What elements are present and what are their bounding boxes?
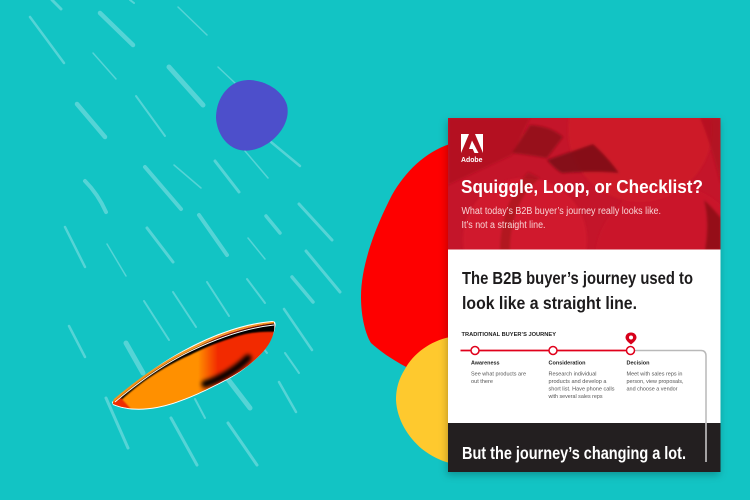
- stage description: Meet with sales reps in: [626, 372, 683, 378]
- red header panel: [448, 118, 720, 250]
- stage description: See what products are: [471, 372, 526, 378]
- stage description: [471, 372, 526, 385]
- header subtitle: [462, 206, 661, 231]
- dark footer band: [448, 423, 720, 472]
- Adobe logo: [461, 134, 483, 164]
- stage description: Research individual: [548, 372, 596, 378]
- main heading: [462, 268, 693, 313]
- rain-like streak pattern: [30, 0, 340, 465]
- logo mark: [461, 134, 483, 153]
- heading line 2: look like a straight line.: [462, 293, 637, 313]
- icon: location pin: [626, 332, 636, 344]
- stage description: [548, 372, 615, 400]
- surfboard outline: [112, 321, 276, 410]
- surfboard shape with orange gradient: [112, 321, 276, 410]
- footer rule: [705, 423, 707, 462]
- stage title: Consideration: [548, 360, 586, 366]
- surfboard highlights: [114, 322, 274, 400]
- card base: [448, 118, 720, 472]
- heading line 1: The B2B buyer’s journey used to: [462, 268, 693, 288]
- stage marker: consideration: [549, 346, 557, 354]
- gray continuation line: [635, 350, 706, 462]
- stage description: person, view proposals,: [626, 379, 684, 385]
- subtitle line 2: It’s not a straight line.: [462, 220, 546, 231]
- red blob: [361, 144, 450, 400]
- blue blob: [216, 80, 288, 151]
- logo wordmark: Adobe: [461, 155, 482, 164]
- subtitle line 1: What today’s B2B buyer’s journey really looks like.: [462, 206, 661, 217]
- stage title: Decision: [626, 360, 650, 366]
- footer background: [448, 423, 720, 472]
- header circle pattern: [448, 118, 720, 250]
- stage description: with several sales reps: [548, 394, 603, 400]
- stage description: short list. Have phone calls: [548, 386, 615, 392]
- stage description: products and develop a: [548, 379, 607, 385]
- stage marker: decision: [626, 346, 634, 354]
- stage: consideration: [548, 360, 615, 400]
- stage description: out there: [471, 379, 493, 385]
- surfboard fill: [113, 323, 274, 409]
- footer text: But the journey’s changing a lot.: [462, 443, 686, 463]
- stage: decision: [626, 360, 684, 392]
- red timeline: [460, 346, 634, 354]
- stage description: and choose a vendor: [626, 386, 678, 392]
- stage description: [626, 372, 684, 392]
- header background: [448, 118, 721, 250]
- journey label: TRADITIONAL BUYER’S JOURNEY: [462, 332, 556, 338]
- stage: awareness: [471, 360, 526, 385]
- document card: [442, 118, 723, 478]
- timeline bar: [460, 350, 630, 352]
- header title: Squiggle, Loop, or Checklist?: [461, 177, 703, 197]
- yellow blob: [396, 337, 450, 463]
- stage marker: awareness: [471, 346, 479, 354]
- stage title: Awareness: [471, 360, 500, 366]
